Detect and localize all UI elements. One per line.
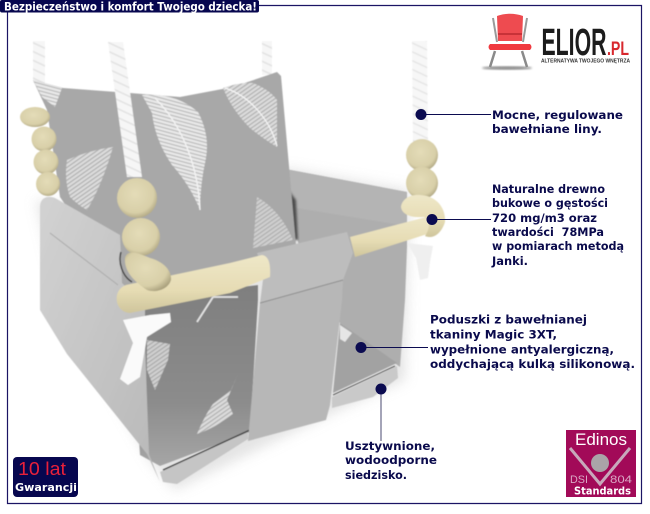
logo: Elior.pl bbox=[482, 14, 630, 70]
rope knot bbox=[120, 313, 171, 385]
callout: seat: Usztywnione, bbox=[345, 439, 435, 453]
callout: ropes bbox=[416, 108, 623, 136]
feather: top right bbox=[223, 83, 277, 147]
right rope bbox=[412, 41, 428, 145]
feather: top centre bbox=[142, 95, 207, 210]
feather scrap bbox=[340, 325, 352, 342]
badge: Edinos standards: 804 bbox=[610, 474, 632, 486]
badge: Edinos standards: DSI bbox=[570, 474, 588, 486]
badge: 10 years warranty: Gwarancji bbox=[15, 482, 77, 494]
dark ring bbox=[120, 252, 132, 282]
swing illustration bbox=[20, 41, 445, 490]
centre rope bbox=[108, 42, 142, 177]
back ropes bbox=[33, 41, 272, 83]
beads: right bbox=[401, 139, 445, 237]
icon: red chair bbox=[482, 14, 532, 70]
inner feather: left bbox=[147, 340, 170, 390]
callout: seat: wodoodporne bbox=[345, 453, 437, 467]
beads: back left bbox=[20, 107, 60, 196]
feather: lower right bbox=[253, 197, 293, 248]
logo domain: .PL bbox=[607, 39, 629, 60]
callout: wood: twardości 78MPa bbox=[492, 225, 604, 239]
callout: seat bbox=[345, 384, 437, 482]
rope below right post bbox=[407, 243, 433, 280]
callout: wood: w pomiarach metodą bbox=[492, 239, 624, 253]
right seat cushion bbox=[333, 323, 397, 393]
callout: seat: siedzisko. bbox=[345, 468, 407, 482]
right side panel bbox=[280, 168, 407, 367]
back cushion bbox=[33, 72, 296, 292]
callout: wood: Janki. bbox=[491, 254, 528, 268]
badge: 10 years warranty: 10 lat bbox=[18, 459, 66, 479]
badge: Edinos standards bbox=[566, 430, 636, 498]
front strap bbox=[248, 232, 353, 441]
badge: Edinos standards: Standards bbox=[574, 486, 631, 498]
logo tagline: ALTERNATYWA TWOJEGO WNĘTRZA bbox=[541, 58, 630, 64]
callout: wood: bukowe o gęstości bbox=[492, 196, 608, 210]
soft shadow bbox=[36, 168, 410, 490]
beads: front left bbox=[117, 178, 171, 291]
left side panel bbox=[40, 197, 160, 482]
wooden bar bbox=[117, 216, 440, 313]
callout: wood: 720 mg/m3 oraz bbox=[492, 211, 597, 225]
badge: 10 years warranty bbox=[13, 457, 78, 497]
seat front fold bbox=[160, 432, 248, 484]
seat strips bbox=[332, 366, 398, 408]
feather: top left bbox=[33, 80, 62, 107]
callout: ropes: bawełniane liny. bbox=[492, 122, 602, 136]
callout: wood bbox=[426, 182, 624, 268]
callout: cushions: oddychającą kulką silikonową. bbox=[430, 357, 635, 371]
callout: cushions bbox=[356, 312, 635, 371]
callout: ropes: Mocne, regulowane bbox=[492, 108, 623, 122]
feather: lower left bbox=[66, 147, 113, 210]
front opening bbox=[130, 285, 258, 466]
seat shadow line bbox=[333, 366, 395, 395]
inner feather line bbox=[197, 297, 238, 322]
callout: wood: Naturalne drewno bbox=[492, 182, 605, 196]
callout: cushions: tkaniny Magic 3XT, bbox=[430, 328, 557, 342]
callout: cushions: wypełnione antyalergiczną, bbox=[430, 342, 614, 356]
seat edge shadow bbox=[163, 430, 250, 470]
inner feather: bottom bbox=[197, 374, 238, 434]
badge: Edinos standards: Edinos bbox=[575, 430, 627, 449]
callout: cushions: Poduszki z bawełnianej bbox=[430, 312, 587, 326]
